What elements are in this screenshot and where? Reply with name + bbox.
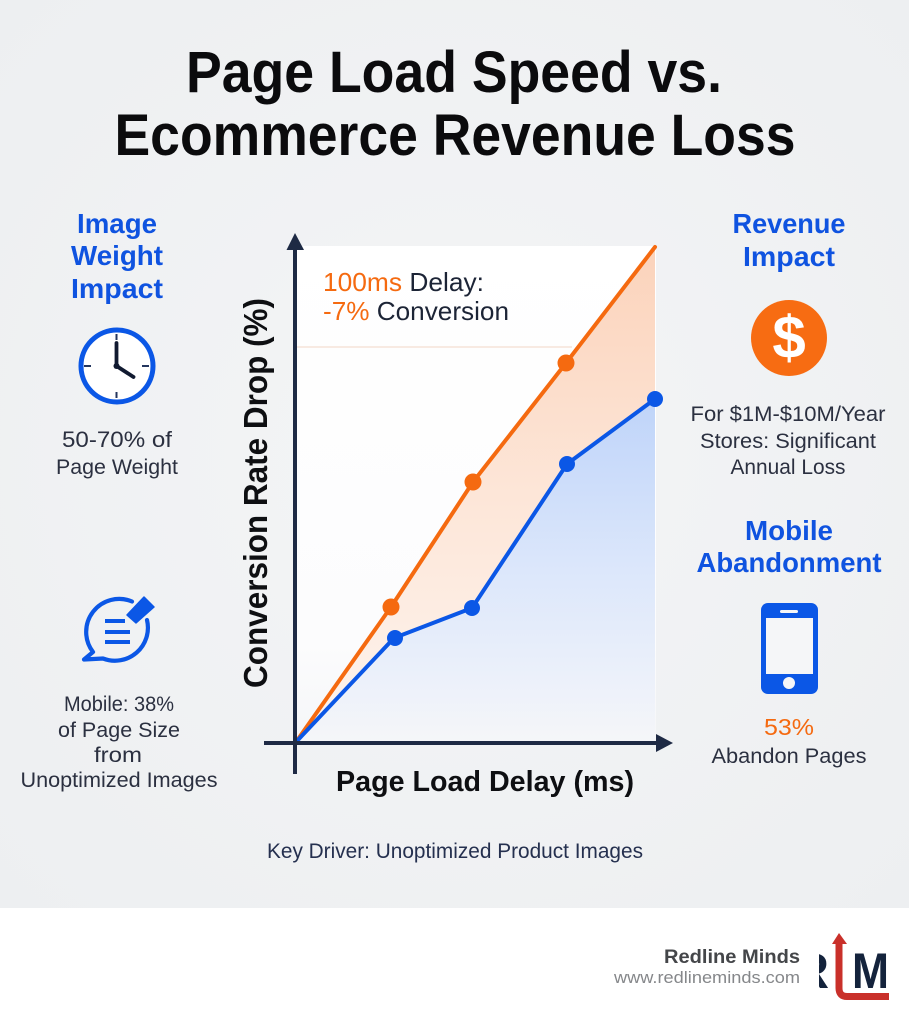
heading: image weight impact: Image [77, 208, 157, 239]
text: mobile page size stat: Mobile: 38% [64, 693, 174, 716]
reference line [297, 346, 572, 348]
panel: mobile abandonment [696, 515, 882, 768]
line: blue series [296, 391, 663, 742]
text: abandonment stat: 53% [764, 714, 814, 740]
logo: RM with arrow [819, 933, 889, 1000]
heading: mobile abandonment [696, 515, 882, 578]
text: abandonment stat [712, 714, 866, 768]
brand text: www.redlineminds.com [613, 968, 800, 987]
logo: RM with arrow: R [793, 943, 829, 999]
brand text [613, 947, 800, 987]
text: page weight stat: Page Weight [56, 456, 178, 479]
icon: dollar coin [751, 300, 827, 376]
annotation: 100ms delay: -7% Conversion [323, 296, 509, 326]
title: Page Load Speed vs. [186, 40, 722, 105]
heading: revenue impact: Revenue [732, 208, 846, 239]
logo: RM with arrow: M [852, 943, 889, 999]
footer band [0, 908, 909, 1024]
panel: mobile page size [20, 597, 218, 792]
chart: conversion drop vs delay [237, 233, 673, 798]
text: mobile page size stat: from [94, 744, 142, 767]
title: Ecommerce Revenue Loss [114, 103, 796, 168]
icon: dollar coin: $ [772, 304, 806, 371]
heading: image weight impact: Impact [71, 273, 163, 304]
icon: smartphone [761, 603, 818, 694]
heading: mobile abandonment: Mobile [745, 515, 833, 546]
heading: image weight impact: Weight [71, 240, 163, 271]
text: mobile page size stat [20, 693, 218, 792]
text: revenue impact detail: Stores: Significant [700, 430, 876, 453]
brand: redline minds [613, 933, 889, 999]
panel: revenue impact [690, 208, 886, 479]
area: orange band [296, 247, 655, 742]
y axis label: Conversion Rate Drop (%) [237, 298, 274, 688]
text: abandonment stat: Abandon Pages [712, 745, 866, 768]
heading: image weight impact [71, 208, 163, 304]
x axis arrow [264, 734, 673, 752]
text: mobile page size stat: of Page Size [58, 719, 180, 742]
title [114, 40, 796, 168]
annotation: 100ms delay: 100ms Delay: [323, 267, 484, 297]
text: revenue impact detail: For $1M-$10M/Year [690, 403, 886, 426]
text: page weight stat: 50-70% of [62, 427, 173, 452]
y axis arrow [286, 233, 304, 774]
caption: key driver: Key Driver: Unoptimized Product Images [267, 840, 643, 863]
heading: revenue impact: Impact [743, 241, 835, 272]
text: revenue impact detail: Annual Loss [730, 456, 846, 479]
annotation: 100ms delay [323, 267, 509, 326]
icon: clock [81, 330, 153, 402]
text: page weight stat [56, 427, 178, 479]
area: blue band [296, 399, 655, 742]
line: orange series [296, 247, 655, 742]
text: revenue impact detail [690, 403, 886, 479]
icon: chat bubble with note [84, 597, 154, 661]
panel: image weight impact [56, 208, 178, 479]
heading: mobile abandonment: Abandonment [696, 547, 882, 578]
x axis label: Page Load Delay (ms) [336, 766, 634, 798]
heading: revenue impact [732, 208, 846, 272]
text: mobile page size stat: Unoptimized Images [20, 769, 218, 792]
brand text: Redline Minds [664, 947, 800, 968]
plot background [297, 246, 656, 742]
